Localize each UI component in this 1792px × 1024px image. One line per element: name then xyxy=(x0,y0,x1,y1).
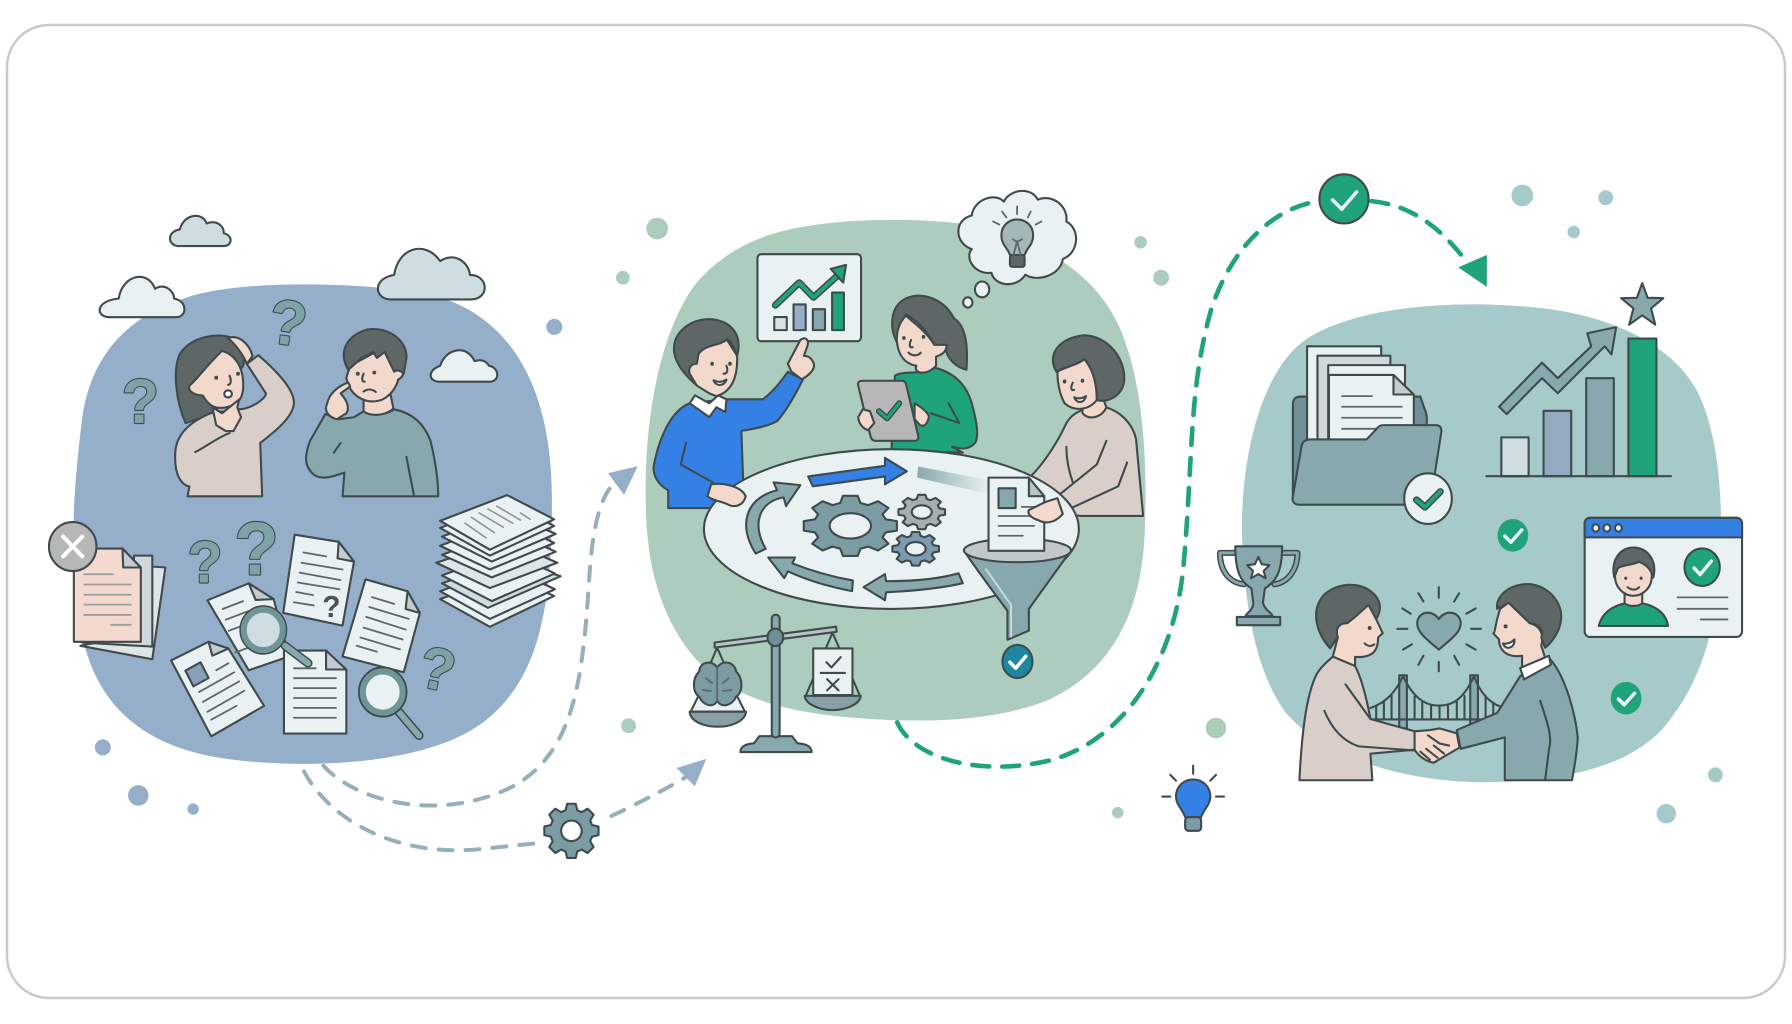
pivot xyxy=(767,629,783,646)
magnifier one xyxy=(240,606,308,663)
question mark right of documents: ? xyxy=(414,634,461,706)
facial features xyxy=(1063,379,1086,402)
hand on table xyxy=(707,484,746,506)
dashed path: lower branch to first gear xyxy=(304,771,535,850)
teal sweater xyxy=(1457,658,1578,780)
cloud left xyxy=(100,277,184,317)
window controls xyxy=(1592,524,1622,532)
towers xyxy=(1399,675,1407,728)
document under magnifier xyxy=(207,583,289,670)
dashed path: gear to meeting panel xyxy=(611,777,686,816)
decorative dots: green xyxy=(616,218,1226,818)
cables and deck xyxy=(1370,676,1501,719)
thought bubble with light bulb xyxy=(958,191,1076,308)
face xyxy=(346,346,404,401)
panel: successful outcomes xyxy=(1220,283,1742,782)
document with question mark xyxy=(283,535,354,626)
growth bar chart xyxy=(1486,283,1671,476)
handles fill xyxy=(1220,553,1297,584)
facial details xyxy=(334,371,414,496)
stack of papers xyxy=(436,495,561,627)
connectors, dots and small icons xyxy=(95,174,1723,858)
heart xyxy=(1417,613,1461,650)
question mark left of woman: ? xyxy=(122,367,159,437)
arrowhead: gear branch xyxy=(677,759,706,786)
document right xyxy=(343,579,420,672)
arm lines xyxy=(1324,684,1415,750)
face xyxy=(1493,603,1545,668)
facial features xyxy=(902,335,925,355)
decorative dots: blue xyxy=(95,319,562,815)
medium gear xyxy=(898,495,945,529)
funnel output check badge xyxy=(1002,645,1032,678)
hair xyxy=(674,319,739,385)
tablet check mark xyxy=(879,403,899,418)
profile window xyxy=(1585,518,1742,637)
green background blob xyxy=(646,220,1145,721)
trailing circles xyxy=(975,282,989,297)
neck xyxy=(364,394,393,415)
verified badge centre xyxy=(1498,519,1528,552)
beige sweater xyxy=(175,355,294,496)
arm lines xyxy=(1057,441,1127,512)
hand on chin xyxy=(212,399,241,431)
arrowhead: green xyxy=(1458,255,1487,287)
chart card xyxy=(757,254,861,341)
beam xyxy=(715,627,837,648)
base xyxy=(1237,617,1280,625)
left hand xyxy=(858,409,874,430)
blue sweater xyxy=(654,372,803,508)
blue background blob xyxy=(73,284,552,764)
page fold xyxy=(122,549,141,567)
hair xyxy=(1497,584,1561,648)
cloud right xyxy=(431,350,497,382)
question mark above woman: ? xyxy=(265,286,311,361)
handshake xyxy=(1415,728,1459,763)
neck xyxy=(1082,395,1106,417)
cycle arrow: bottom right xyxy=(864,573,963,600)
hand over document xyxy=(1028,498,1063,522)
cycle arrow: blue top xyxy=(808,458,907,486)
handles outline xyxy=(1220,553,1297,584)
round table xyxy=(704,449,1079,609)
tablet xyxy=(858,381,918,441)
face xyxy=(189,351,243,408)
X mark xyxy=(63,537,82,556)
approved badge xyxy=(1404,473,1452,524)
cloud top xyxy=(170,216,231,246)
card background xyxy=(757,254,861,341)
white collar xyxy=(690,395,726,417)
cycle arrow: fading top right xyxy=(917,467,990,494)
base xyxy=(740,736,812,752)
beige jacket xyxy=(1299,657,1415,780)
person: woman in beige xyxy=(1031,335,1143,516)
small question mark: ? xyxy=(322,590,340,624)
person: puzzled woman xyxy=(175,336,294,496)
hair xyxy=(344,329,406,374)
small gear xyxy=(892,532,939,566)
cycle arrow: left curve xyxy=(746,482,800,554)
person: right partner xyxy=(1457,584,1578,780)
light bulb xyxy=(1001,219,1033,255)
heart with rays xyxy=(1397,587,1481,671)
balance scale xyxy=(690,615,861,752)
decorative dots: teal xyxy=(1511,185,1723,823)
right pan xyxy=(805,633,861,710)
bridge xyxy=(1370,675,1501,728)
window body xyxy=(1585,518,1742,637)
growth arrow xyxy=(1499,327,1616,414)
face xyxy=(688,340,737,396)
gear icon on path xyxy=(544,804,599,858)
light bulb icon xyxy=(1162,766,1224,831)
question mark over documents centre: ? xyxy=(234,507,279,591)
left pan xyxy=(690,648,746,727)
cup xyxy=(1235,546,1282,616)
large gear xyxy=(804,496,897,556)
person: presenter in blue xyxy=(654,319,814,508)
facial details xyxy=(195,372,240,452)
teal sweater xyxy=(306,409,438,496)
arm fold line xyxy=(681,443,713,482)
hair xyxy=(1316,585,1380,648)
hand on head xyxy=(228,337,253,364)
check mark xyxy=(1694,561,1711,575)
back sheets xyxy=(1307,346,1381,444)
document bottom centre xyxy=(284,651,346,734)
teal background blob xyxy=(1242,304,1721,782)
post xyxy=(772,615,780,737)
trophy xyxy=(1220,546,1297,625)
person: puzzled man xyxy=(306,329,438,496)
question mark over documents left: ? xyxy=(188,530,223,596)
arm line xyxy=(1540,701,1550,780)
blue title bar xyxy=(1585,518,1742,537)
verified badge lower right xyxy=(1611,682,1641,715)
panel: confusion and scattered documents xyxy=(49,216,561,764)
cycle arrow: bottom left xyxy=(768,557,853,591)
dashed green path from meeting to check xyxy=(897,201,1320,767)
bubble xyxy=(958,191,1076,284)
folder with documents xyxy=(1293,346,1452,524)
front document xyxy=(1329,375,1414,441)
person: woman with tablet xyxy=(858,296,977,453)
neck and face xyxy=(1333,605,1383,666)
document with photo xyxy=(171,642,264,736)
rays xyxy=(1397,587,1481,671)
dashed green path from check to outcomes xyxy=(1371,201,1467,263)
funnel highlight xyxy=(986,569,1011,637)
facial features xyxy=(1365,626,1374,646)
cloud large xyxy=(378,249,485,299)
funnel rim xyxy=(964,539,1071,562)
brain xyxy=(694,663,741,705)
verified check xyxy=(1684,548,1720,586)
green check badge on path xyxy=(1319,174,1369,223)
facial features xyxy=(710,362,732,385)
arrowhead: upper branch xyxy=(608,466,638,495)
rejected document stack xyxy=(49,522,165,659)
bars xyxy=(774,293,844,330)
magnifier two xyxy=(359,668,419,736)
funnel xyxy=(964,539,1071,640)
white collar xyxy=(1520,656,1551,679)
profile text lines xyxy=(1678,597,1727,619)
hair xyxy=(176,336,244,423)
green sweater xyxy=(891,368,977,453)
star xyxy=(1621,283,1663,325)
scattered documents xyxy=(171,535,420,736)
pointing hand xyxy=(788,338,814,380)
funnel cone xyxy=(964,550,1071,640)
pink document xyxy=(74,549,141,642)
hair xyxy=(1053,335,1124,401)
hair xyxy=(892,296,967,370)
trophy star xyxy=(1247,557,1269,578)
checklist on pan xyxy=(813,648,852,695)
face xyxy=(897,316,947,373)
text lines xyxy=(84,574,131,625)
face xyxy=(1057,359,1097,409)
dashed path: upper branch to meeting panel xyxy=(323,482,615,806)
hand at temple xyxy=(326,382,350,419)
folder back xyxy=(1293,397,1427,497)
right hand xyxy=(915,403,929,426)
folder front xyxy=(1293,425,1441,505)
bars xyxy=(1501,339,1656,476)
panel: collaborative analysis meeting xyxy=(646,191,1145,752)
back sheets xyxy=(80,566,165,659)
trend arrow xyxy=(775,265,846,305)
beige sweater xyxy=(1031,407,1143,516)
baseline xyxy=(1486,475,1671,477)
arm line xyxy=(931,403,959,423)
X badge xyxy=(49,522,96,571)
person: left partner xyxy=(1299,585,1415,780)
facial features xyxy=(1503,624,1514,648)
document entering funnel xyxy=(989,478,1044,551)
profile person xyxy=(1599,548,1668,626)
